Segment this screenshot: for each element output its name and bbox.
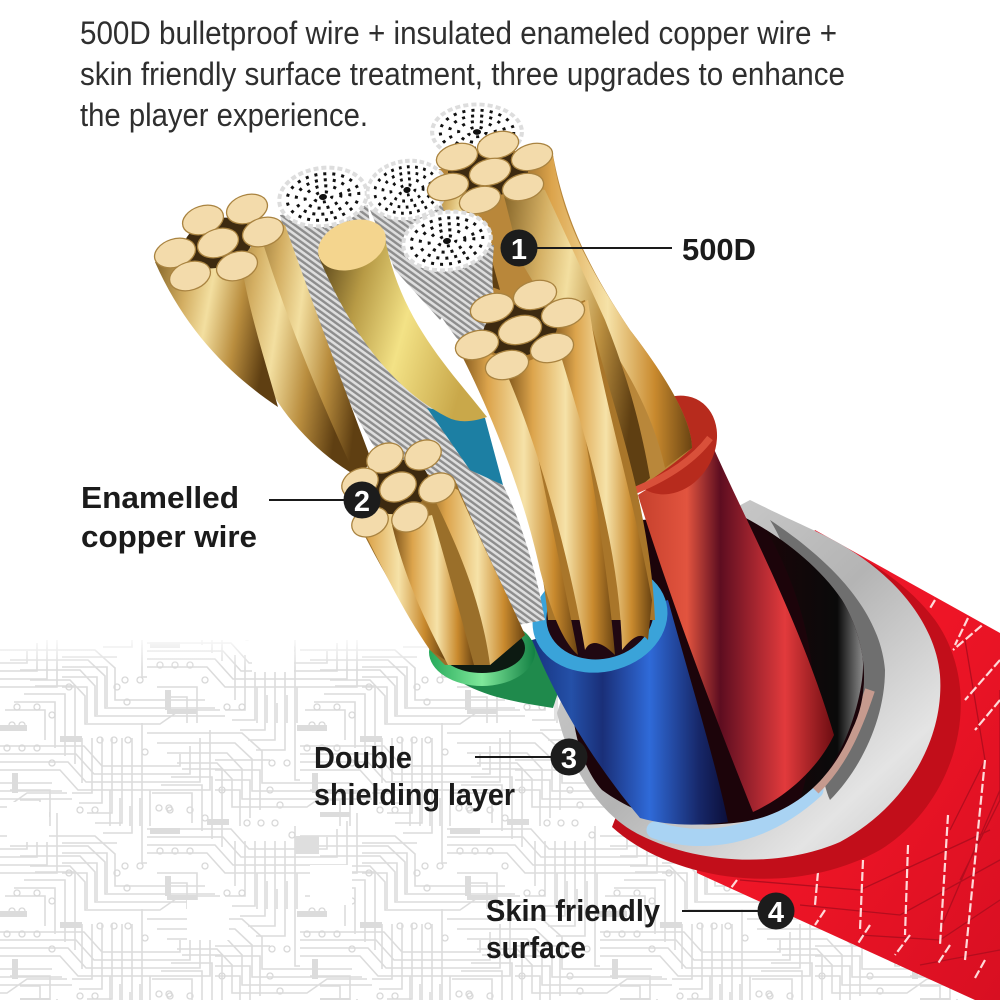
- callout 2: enamelled copper wire: Enamelled: [81, 480, 239, 515]
- red insulated tube: [609, 379, 834, 812]
- dark interior opening: [571, 515, 864, 824]
- green insulated tube: [429, 618, 575, 708]
- blue insulated tube: [522, 551, 728, 825]
- jacket weave lines: [728, 600, 1000, 978]
- silver strand end, front: [398, 205, 496, 277]
- callout 3: double shielding layer: Double: [314, 740, 412, 775]
- title text: skin friendly surface treatment, three upgrades to enhance: [80, 56, 845, 92]
- blue core patch: [427, 408, 503, 485]
- callout 2: enamelled copper wire: [81, 480, 380, 554]
- callout 4: skin friendly surface: 4: [768, 897, 784, 929]
- callout 2: enamelled copper wire: 2: [354, 486, 370, 518]
- callout 1: 500D: 1: [511, 234, 527, 266]
- silver strand ends: [274, 104, 523, 233]
- red braided cable jacket: [612, 530, 1000, 1000]
- inner dark sleeve: [770, 520, 885, 800]
- callout 4: skin friendly surface: surface: [486, 930, 586, 965]
- gold bundle, centre right: [452, 276, 655, 655]
- bronze reflection on ring: [815, 690, 870, 790]
- silver bulletproof strand: [280, 200, 545, 630]
- callout 1: 500D: [500, 230, 756, 267]
- gold bundle caps, top right: [424, 127, 556, 218]
- gold bundle behind, top right: [428, 150, 710, 490]
- callout 2: enamelled copper wire: copper wire: [81, 519, 257, 554]
- title text: the player experience.: [80, 97, 368, 133]
- callout 4: skin friendly surface: [486, 892, 794, 965]
- blue highlight on ring: [655, 790, 815, 837]
- callout 3: double shielding layer: shielding layer: [314, 777, 515, 812]
- red jacket rim: [612, 535, 961, 879]
- callout 4: skin friendly surface: Skin friendly: [486, 893, 661, 928]
- inner sleeve shading: [760, 520, 863, 800]
- callout 3: double shielding layer: [314, 738, 588, 812]
- gold bundle, top left: [151, 189, 372, 478]
- title text: [80, 15, 845, 133]
- red tube front lip: [636, 438, 710, 490]
- gold bundle, lower left: [337, 434, 525, 665]
- large gold core wire: [311, 210, 487, 421]
- circuit board background pattern: [0, 632, 1000, 1000]
- title text: 500D bulletproof wire + insulated enameled copper wire +: [80, 15, 837, 51]
- silver shielding layer: [557, 500, 940, 860]
- callout 1: 500D: 500D: [682, 232, 756, 267]
- callout 3: double shielding layer: 3: [561, 743, 577, 775]
